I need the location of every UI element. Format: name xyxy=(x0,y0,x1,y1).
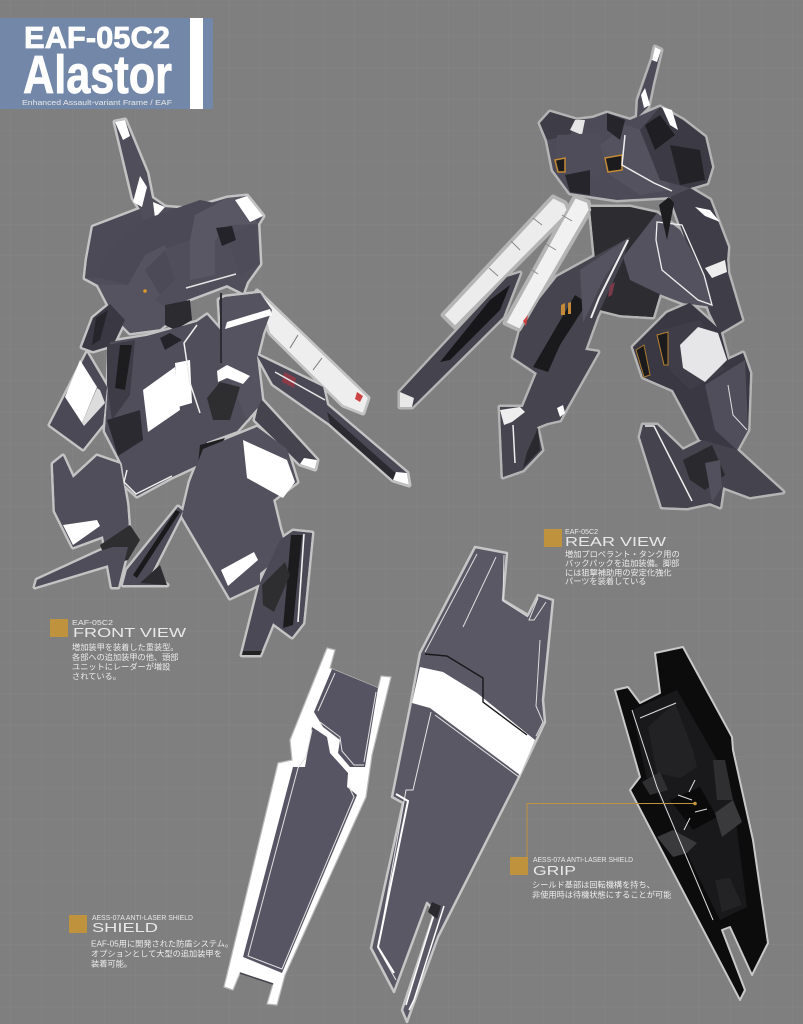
label: rear view: 増加プロペラント・タンク用の xyxy=(565,549,680,559)
label: shield: オプションとして大型の追加装甲を xyxy=(91,948,222,958)
label: grip: AESS-07A ANTI-LASER SHIELD xyxy=(533,855,634,864)
right leg and foot xyxy=(182,427,312,655)
shield grip, inner face xyxy=(615,647,768,1000)
title banner xyxy=(0,18,213,109)
torso xyxy=(105,315,260,496)
label: rear view: バックパックを追加装備。脚部 xyxy=(565,558,679,568)
torso and binder rear xyxy=(590,188,742,333)
grip inner frame xyxy=(632,690,747,920)
label: rear view: には狙撃補助用の安定化強化 xyxy=(565,568,671,578)
label: front view: 各部への追加装甲の他、頭部 xyxy=(72,652,178,662)
antenna rear xyxy=(641,47,661,108)
label: grip: GRIP xyxy=(533,863,576,878)
left leg rear xyxy=(500,237,630,477)
armored shield panel with white band xyxy=(371,547,553,1022)
title banner: EAF-05C2 xyxy=(24,20,170,55)
label: rear view: パーツを装着している xyxy=(565,576,646,586)
label: rear view: EAF-05C2 xyxy=(565,527,598,536)
antenna xyxy=(115,120,165,218)
label: shield: SHIELD xyxy=(92,920,158,935)
propellant tanks rear xyxy=(443,197,590,330)
label: front view: EAF-05C2 xyxy=(72,618,113,627)
label: shield: 装着可能。 xyxy=(91,958,132,968)
label: grip xyxy=(510,855,671,900)
rear view mecha xyxy=(400,47,783,508)
grip leader line xyxy=(527,802,697,858)
propellant tank xyxy=(257,291,368,413)
left leg xyxy=(35,456,183,587)
right shoulder and fist xyxy=(207,293,272,420)
label: front view xyxy=(50,618,187,681)
shield with white rim xyxy=(224,648,391,1005)
label: rear view xyxy=(544,527,680,586)
upper left arm xyxy=(50,304,125,449)
label: grip: 非使用時は待機状態にすることが可能 xyxy=(532,890,671,900)
label: shield xyxy=(69,913,233,968)
title banner: Enhanced Assault-variant Frame / EAF xyxy=(22,100,172,107)
long blade rear xyxy=(400,273,520,407)
head and backpack xyxy=(85,196,263,333)
right leg rear xyxy=(633,303,783,508)
label: shield: AESS-07A ANTI-LASER SHIELD xyxy=(92,913,194,922)
front view mecha xyxy=(35,120,409,655)
label: front view: 増加装甲を装着した重装型。 xyxy=(72,642,178,652)
label: front view: されている。 xyxy=(72,672,121,681)
label: shield: EAF-05用に開発された防盾システム。 xyxy=(91,938,233,948)
label: front view: FRONT VIEW xyxy=(73,625,187,640)
head rear xyxy=(540,107,712,195)
label: front view: ユニットにレーダーが増設 xyxy=(72,662,170,672)
label: grip: シールド基部は回転機構を持ち、 xyxy=(532,880,655,890)
long blade xyxy=(255,355,409,485)
label: rear view: REAR VIEW xyxy=(565,534,667,549)
title banner: Alastor xyxy=(23,45,172,105)
